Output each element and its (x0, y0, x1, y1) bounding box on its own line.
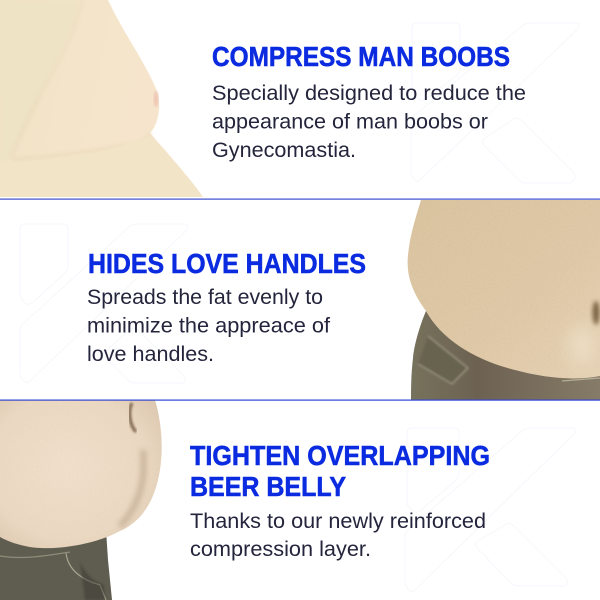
photo: love handle and jeans (408, 200, 600, 400)
watermark: K logo, top panel (411, 23, 579, 183)
heading: HIDES LOVE HANDLES (88, 248, 366, 279)
body text (87, 286, 330, 366)
heading: COMPRESS MAN BOOBS (212, 41, 510, 72)
body text: Gynecomastia. (212, 139, 356, 162)
body text: appearance of man boobs or (212, 110, 488, 134)
body text (190, 510, 486, 561)
heading: TIGHTEN OVERLAPPING (190, 440, 490, 471)
body text: Thanks to our newly reinforced (190, 510, 486, 533)
watermark: K logo, middle panel (20, 224, 188, 383)
body text: compression layer. (190, 538, 371, 561)
heading: BEER BELLY (190, 471, 346, 502)
body text: Spreads the fat evenly to (87, 286, 323, 309)
body text: Specially designed to reduce the (212, 82, 526, 105)
body text: love handles. (87, 343, 214, 366)
watermark: K logo, bottom panel (405, 428, 575, 592)
body text: minimize the appreace of (87, 314, 330, 338)
body text (212, 82, 526, 162)
photo: belly and jeans (0, 400, 162, 600)
panel: tighten overlapping beer belly (0, 400, 575, 600)
panel: compress man boobs (0, 0, 579, 197)
heading (190, 440, 490, 502)
photo: chest in profile (0, 0, 203, 197)
panel: hides love handles (20, 200, 600, 400)
